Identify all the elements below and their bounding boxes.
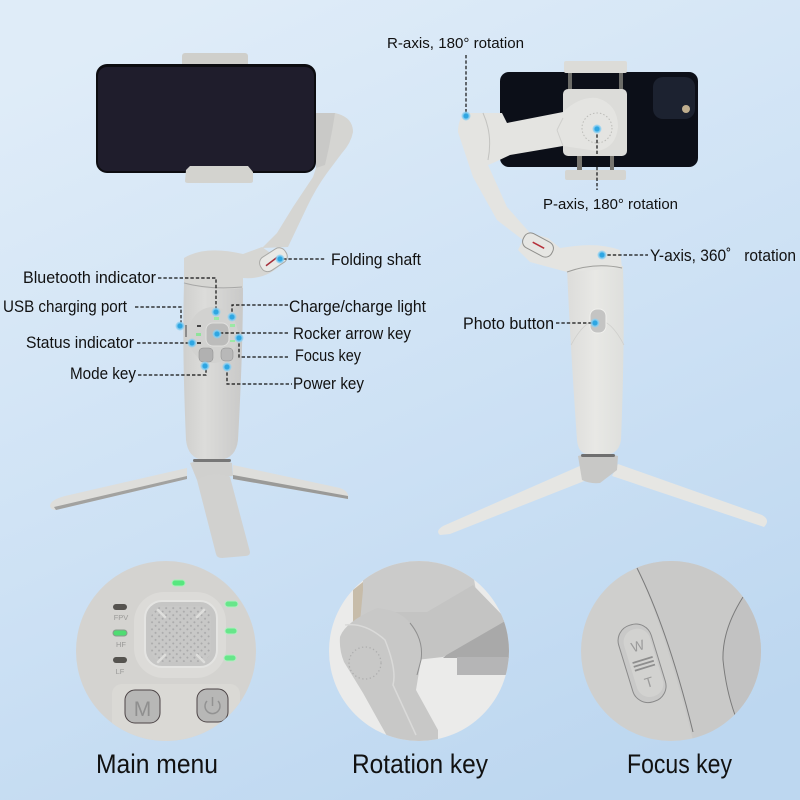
rotating arm [458, 98, 622, 272]
yaw motor head [184, 247, 283, 289]
callout labels: Mode key [70, 364, 136, 383]
axis labels: P-axis, 180° rotation [543, 196, 678, 213]
focus switch: T [642, 673, 656, 691]
phone (right view) [500, 72, 698, 167]
callout labels: Rocker arrow key [293, 324, 411, 343]
detail circle: rotation key [328, 555, 511, 745]
elbow capsule [520, 230, 556, 260]
LED indicators [113, 580, 238, 663]
leader lines [135, 55, 648, 384]
callout labels: Photo button [463, 314, 554, 333]
left gimbal product [50, 53, 353, 558]
callout labels [3, 246, 796, 393]
mode labels: LF [116, 667, 125, 676]
detail circle: main menu [76, 561, 256, 744]
caption: main menu: Main menu [96, 749, 218, 779]
callout dots [176, 112, 606, 370]
caption: focus key: Focus key [627, 749, 732, 779]
focus switch: W [629, 636, 647, 655]
callout labels: Power key [293, 374, 364, 393]
caption: rotation key: Rotation key [352, 749, 488, 779]
callout labels: Folding shaft [331, 250, 421, 269]
tripod legs (right view) [438, 453, 767, 535]
mode labels [114, 613, 128, 676]
callout labels: Focus key [295, 346, 361, 365]
axis labels [387, 35, 678, 213]
photo button [571, 309, 624, 345]
mode labels: HF [116, 640, 126, 649]
M button [125, 690, 160, 723]
handle [183, 284, 243, 460]
detail circle: focus key [580, 560, 765, 742]
arm [407, 588, 504, 660]
button tray [112, 684, 240, 744]
axis labels: R-axis, 180° rotation [387, 35, 524, 52]
knuckle [340, 608, 438, 745]
control pad [185, 307, 238, 363]
M button: M [134, 698, 151, 721]
callout labels: Bluetooth indicator [23, 268, 156, 287]
mode labels: FPV [114, 613, 128, 622]
callout labels: Charge/charge light [289, 297, 426, 316]
background phone edge [353, 582, 363, 625]
callout labels: Status indicator [26, 333, 134, 352]
phone (left view) [96, 53, 316, 183]
power button [197, 689, 228, 722]
phone clamp [563, 61, 627, 180]
base ring [193, 459, 231, 462]
focus switch [618, 624, 666, 704]
callout labels: USB charging port [3, 297, 127, 316]
rocker key [144, 600, 218, 668]
folding arm [262, 113, 353, 248]
folding shaft capsule [257, 245, 290, 274]
handle (right view) [567, 266, 624, 454]
right gimbal product [438, 61, 767, 535]
tripod legs [50, 460, 348, 558]
